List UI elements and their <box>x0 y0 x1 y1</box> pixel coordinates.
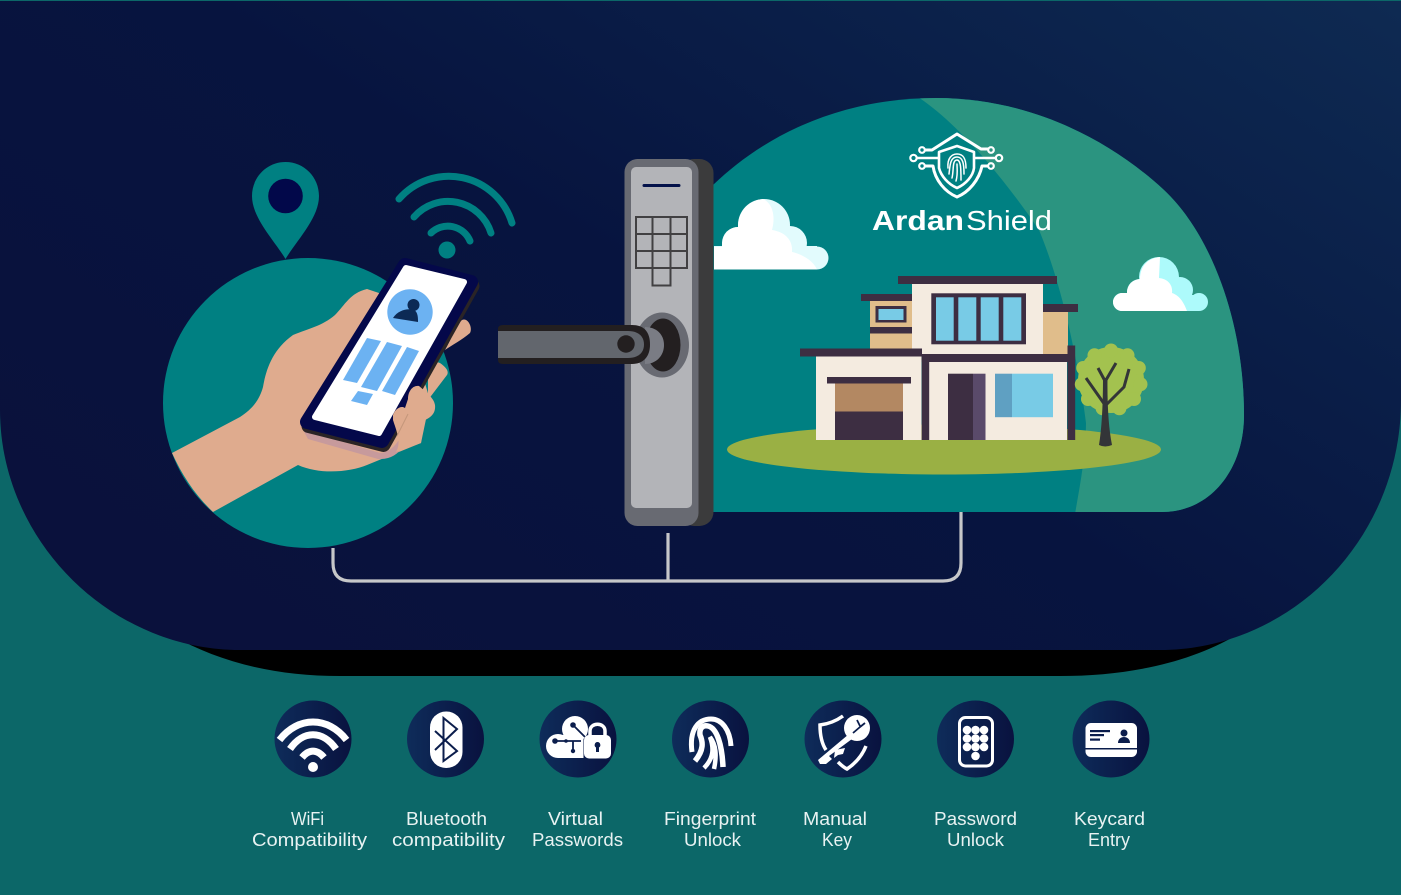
house <box>800 276 1078 440</box>
label: WiFi <box>291 809 324 829</box>
label: Unlock <box>684 830 742 850</box>
icon: wifi <box>280 722 346 772</box>
icon: shield and key <box>818 715 870 769</box>
feature: Password Unlock <box>934 700 1017 850</box>
icon: keycard <box>1086 723 1137 757</box>
screen bars <box>343 338 419 405</box>
lawn <box>727 424 1161 474</box>
main dark panel <box>0 1 1401 650</box>
feature: Manual Key <box>803 700 882 850</box>
fingers <box>393 386 435 452</box>
label: compatibility <box>392 830 505 850</box>
house backdrop <box>700 90 1260 520</box>
label: Bluetooth <box>406 809 487 829</box>
tree <box>1075 344 1148 446</box>
location pin <box>252 162 319 259</box>
label: Manual <box>803 809 867 829</box>
logo wordmark: Ardan <box>872 205 964 236</box>
connector lines <box>333 512 961 581</box>
phone screen <box>315 268 464 433</box>
panel: house scene <box>700 90 1260 520</box>
panel: phone in hand <box>163 162 512 548</box>
logo wordmark: Shield <box>966 205 1052 236</box>
logo fingerprint <box>948 154 966 181</box>
panel: smart door lock <box>498 159 714 526</box>
cloud left <box>714 199 828 270</box>
icon: fingerprint <box>691 719 731 769</box>
lock body <box>680 159 714 526</box>
logo wordmark <box>872 205 1052 236</box>
avatar <box>387 289 433 335</box>
feature: WiFi <box>252 700 367 850</box>
door handle <box>498 312 689 378</box>
label: Passwords <box>532 830 623 850</box>
icon: bluetooth <box>430 712 462 768</box>
label: Keycard <box>1074 809 1145 829</box>
wifi signal icon <box>399 176 512 258</box>
label: Virtual <box>548 809 603 829</box>
label: Unlock <box>947 830 1005 850</box>
black shadow under main panel <box>160 628 1245 676</box>
label: Fingerprint <box>664 809 756 829</box>
label: Compatibility <box>252 830 367 850</box>
logo <box>872 134 1052 236</box>
cloud right <box>1113 257 1208 311</box>
feature: Fingerprint <box>664 700 756 850</box>
feature: Keycard Entry <box>1072 700 1150 850</box>
card slot <box>642 184 680 187</box>
phone <box>303 265 472 459</box>
feature: Virtual Passwords <box>532 700 623 850</box>
icon: cloud and lock <box>546 716 611 758</box>
hand <box>172 289 471 512</box>
logo shield icon <box>910 134 1002 197</box>
icon: keypad <box>960 718 992 766</box>
feature: Bluetooth <box>392 700 505 850</box>
label: Key <box>822 830 852 850</box>
label: Password <box>934 809 1017 829</box>
label: Entry <box>1088 830 1130 850</box>
keypad <box>636 217 687 286</box>
teal circle <box>163 258 453 548</box>
